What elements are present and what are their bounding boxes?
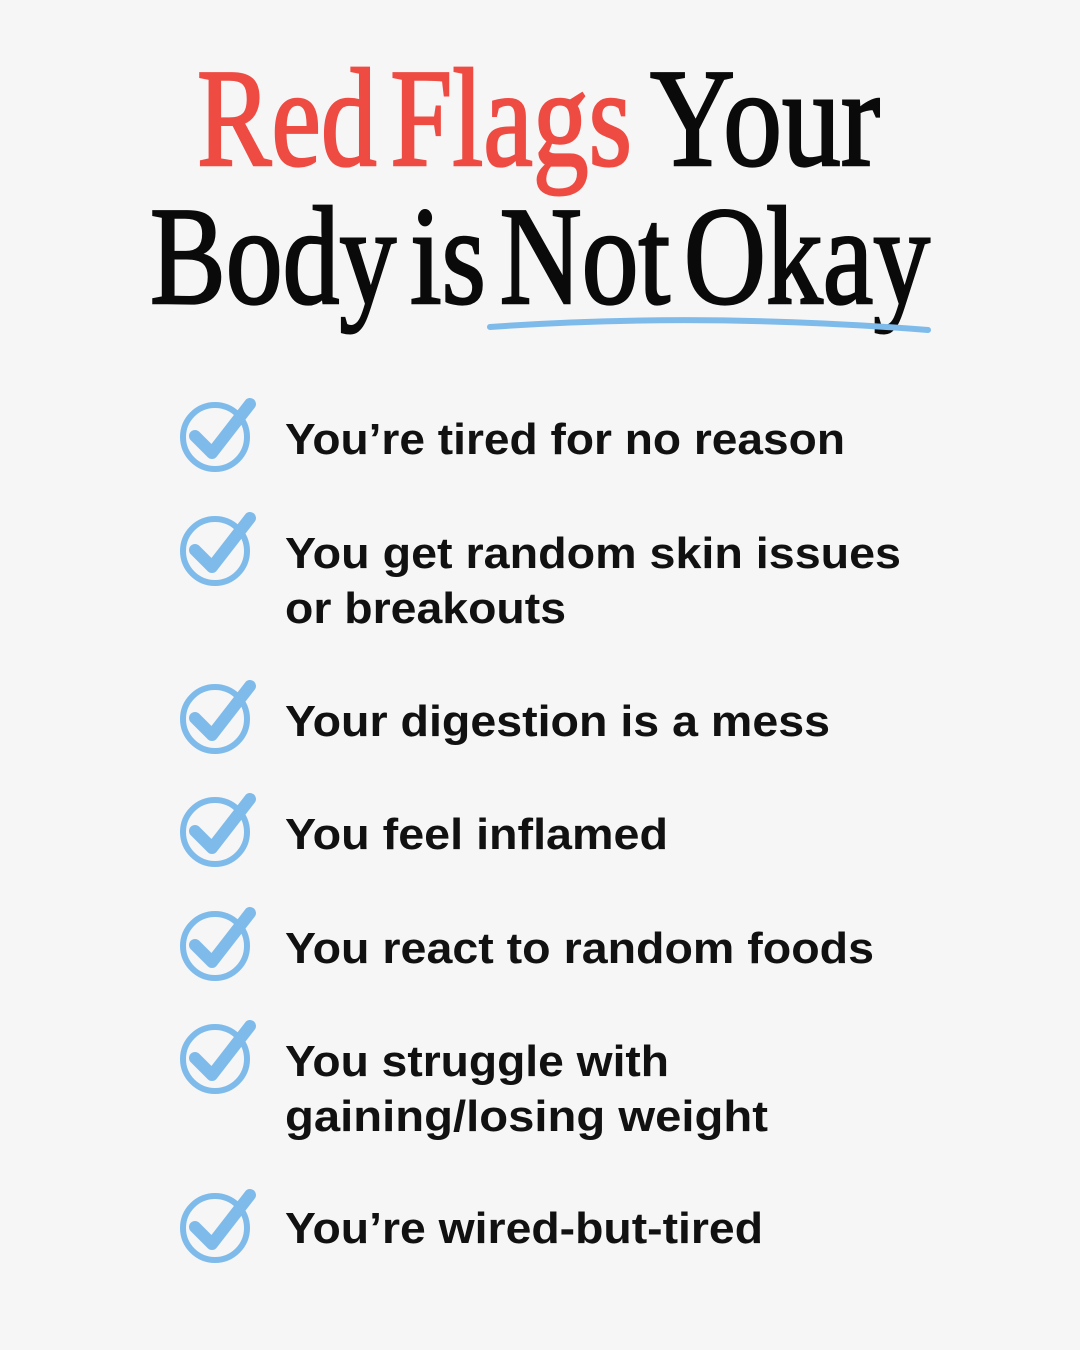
item 1: You’re tired for no reason [285,415,845,464]
item 7 [183,1195,763,1260]
item 2: You get random skin issues [285,529,901,578]
item 2: or breakouts [285,584,566,633]
item 3 [183,686,830,751]
item 4 [183,799,668,864]
item 6: gaining/losing weight [285,1092,768,1141]
title [150,41,930,334]
item 3: Your digestion is a mess [285,697,830,746]
item 2 [183,518,901,633]
item 5 [183,913,874,978]
item 6: You struggle with [285,1037,669,1086]
title: Your [650,41,880,196]
title: Red Flags [197,41,632,196]
item 6 [183,1026,768,1141]
item 7: You’re wired-but-tired [285,1204,763,1253]
item 5: You react to random foods [285,924,874,973]
item 4: You feel inflamed [285,810,668,859]
item 1 [183,404,845,469]
checklist [183,404,901,1260]
title underline [490,320,928,330]
